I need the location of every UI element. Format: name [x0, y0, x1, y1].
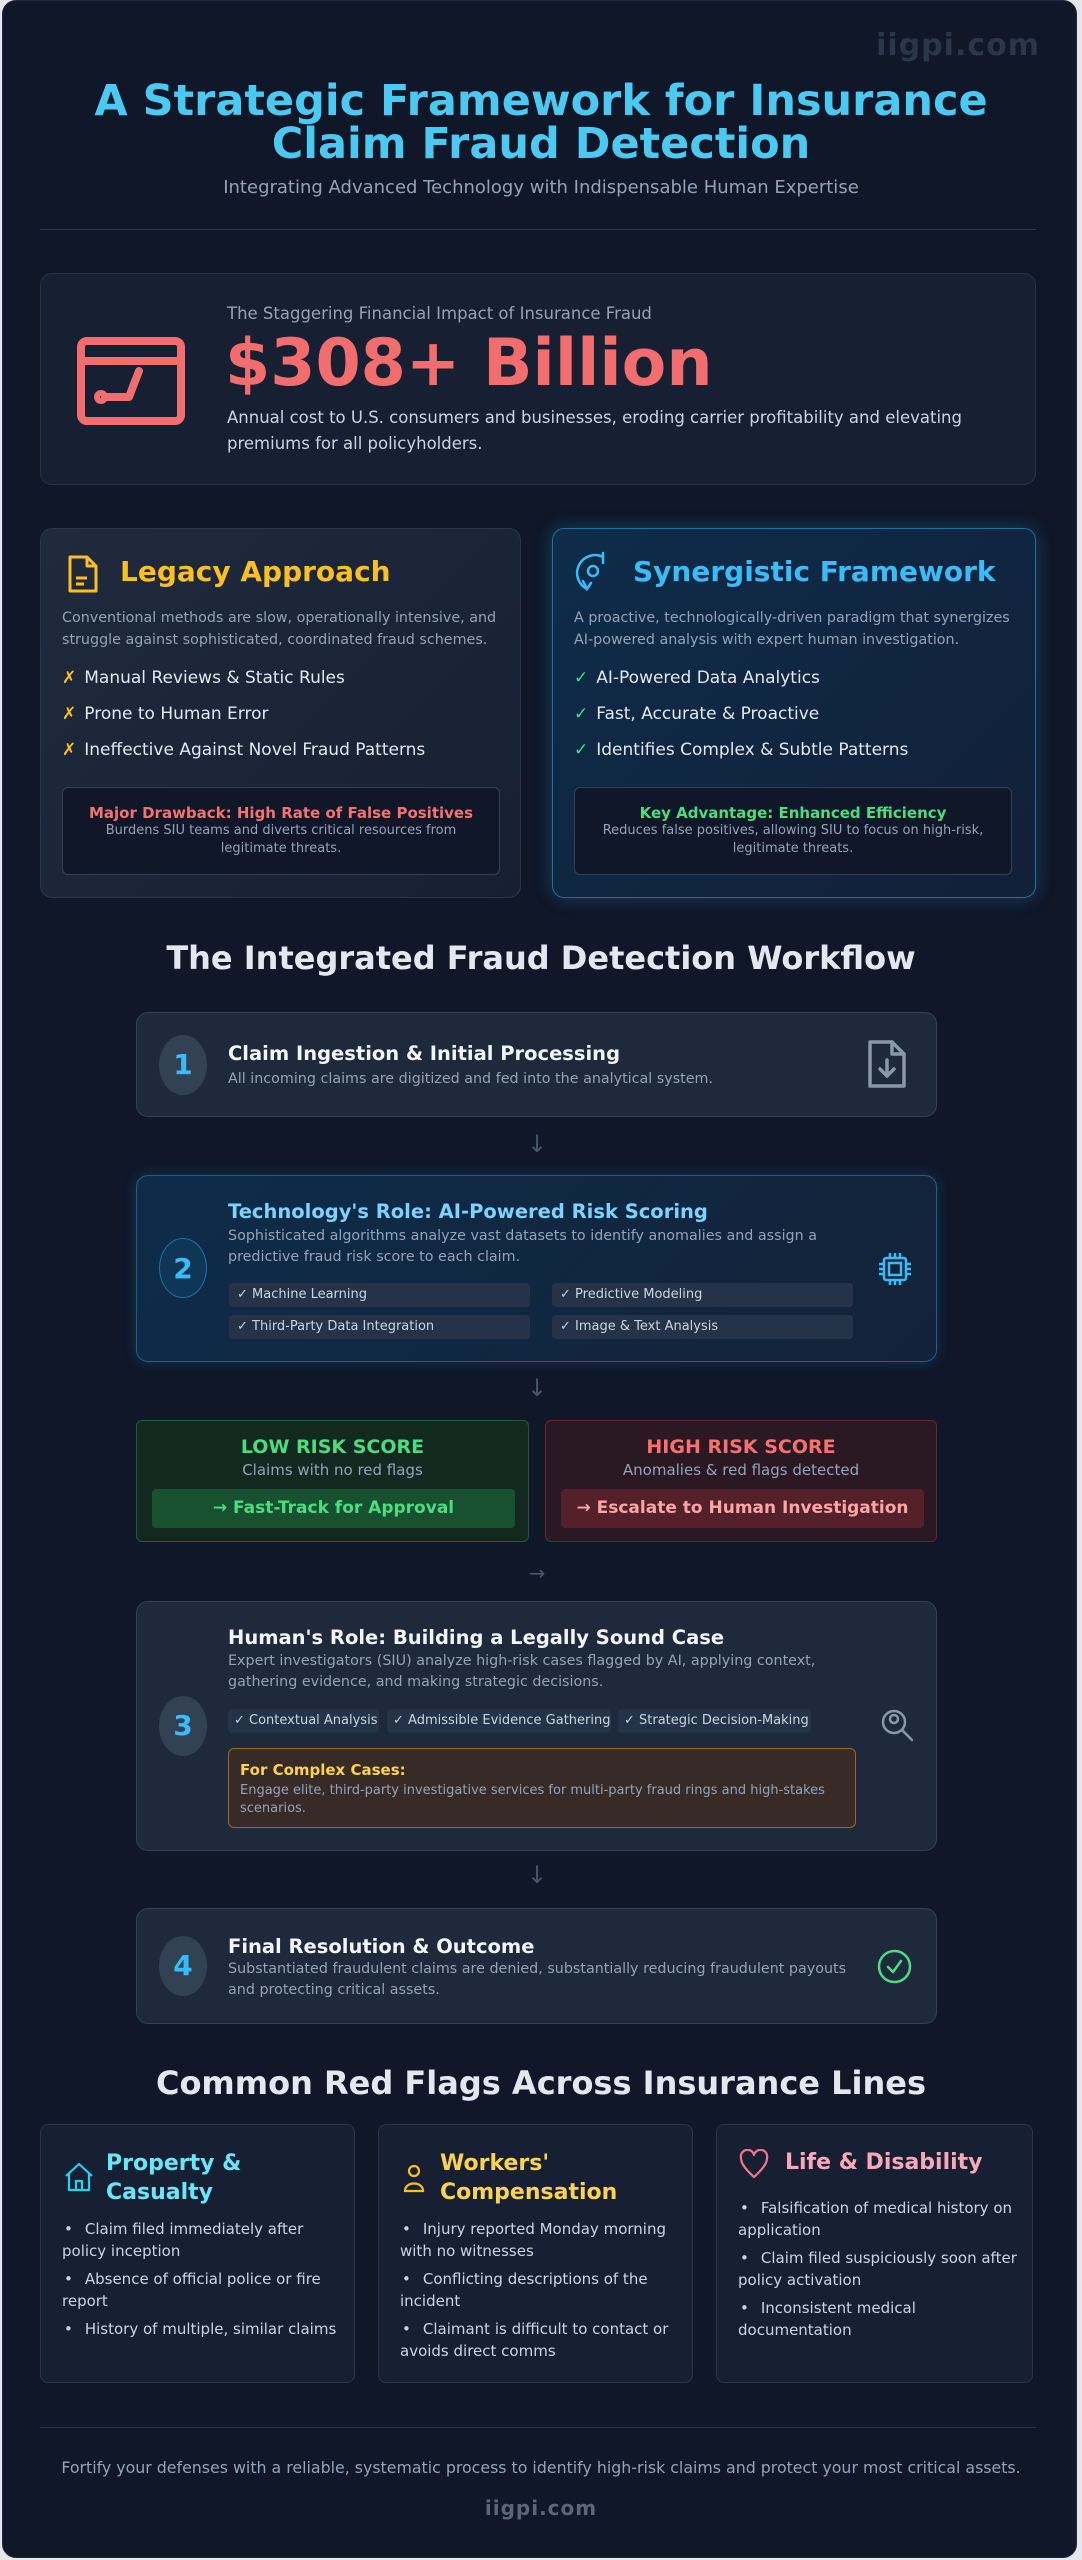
panel: life & disability	[716, 2124, 1033, 2383]
panel: life & disability: Inconsistent medical documentation	[738, 2299, 916, 2339]
list: legacy cons: ✗ Manual Reviews & Static Rules	[62, 668, 345, 688]
step 4 number: 4	[173, 1949, 193, 1982]
list: legacy cons: ✗ Ineffective Against Novel Fraud Patterns	[62, 740, 425, 760]
heading: property: Casualty	[106, 2180, 213, 2205]
callout: advantage	[574, 787, 1012, 875]
icon: check circle	[878, 1950, 912, 1984]
high risk box: HIGH RISK SCORE	[646, 1436, 836, 1458]
list: legacy cons	[62, 668, 425, 760]
step 3 number: 3	[173, 1709, 193, 1742]
heading: life: Life & Disability	[785, 2150, 983, 2175]
panel: life & disability: Claim filed suspiciously soon after policy activation	[738, 2249, 1017, 2289]
icon: person	[404, 2164, 424, 2192]
high risk box	[545, 1420, 937, 1542]
callout: complex cases	[228, 1748, 856, 1828]
panel: life & disability: Falsification of medical history on application	[738, 2199, 1012, 2239]
icon: chip	[879, 1253, 911, 1285]
step 2	[136, 1175, 937, 1362]
list: synergistic pros: ✓ Fast, Accurate & Proactive	[574, 704, 819, 724]
button: fast-track: → Fast-Track for Approval	[213, 1498, 454, 1518]
arrow 2: ↓	[527, 1374, 547, 1402]
step 3 number	[159, 1696, 207, 1756]
callout: advantage: Reduces false positives, allowing SIU to focus on high-risk, legitimate threats.	[603, 823, 983, 856]
arrow 3: →	[529, 1561, 545, 1585]
text: legacy desc: Conventional methods are slow, operationally intensive, and struggle against sophisticated, coordinated fraud schemes.	[62, 610, 496, 648]
panel: property & casualty: History of multiple, similar claims	[85, 2320, 336, 2338]
panel: workers comp	[378, 2124, 693, 2383]
step 1 title: Claim Ingestion & Initial Processing	[228, 1042, 620, 1065]
callout: complex cases: Engage elite, third-party investigative services for multi-party fraud rings and high-stakes scenarios.	[240, 1783, 825, 1816]
step 4	[136, 1908, 937, 2024]
footer watermark: iigpi.com	[485, 2496, 597, 2520]
low risk box: Claims with no red flags	[242, 1461, 423, 1479]
heading: workers: Compensation	[440, 2180, 617, 2205]
big number: $308+ Billion	[225, 326, 713, 401]
step 2 number: 2	[173, 1252, 193, 1285]
button: fast-track	[152, 1489, 515, 1528]
impact description: Annual cost to U.S. consumers and businesses, eroding carrier profitability and elevating premiums for all policyholders.	[227, 408, 962, 453]
list: synergistic pros: ✓ Identifies Complex & Subtle Patterns	[574, 740, 908, 760]
callout: drawback	[62, 787, 500, 875]
subtitle: Integrating Advanced Technology with Indispensable Human Expertise	[223, 177, 859, 198]
panel: property & casualty	[40, 2124, 355, 2383]
text: synergistic desc: A proactive, technologically-driven paradigm that synergizes AI‑powered analysis with expert human investigation.	[574, 610, 1010, 648]
high risk box: Anomalies & red flags detected	[623, 1461, 859, 1479]
step 4 number	[159, 1936, 207, 1996]
step 1 number	[159, 1035, 207, 1095]
step 4 desc: Substantiated fraudulent claims are denied, substantially reducing fraudulent payouts and protecting critical assets.	[228, 1961, 846, 1998]
list: synergistic pros	[574, 668, 908, 760]
button: escalate: → Escalate to Human Investigation	[576, 1498, 909, 1518]
step 1 desc: All incoming claims are digitized and fed into the analytical system.	[228, 1071, 713, 1087]
icon: house	[65, 2162, 93, 2192]
arrow 1: ↓	[527, 1130, 547, 1158]
panel: workers comp: Injury reported Monday morning with no witnesses	[400, 2220, 666, 2260]
heading: property	[106, 2151, 241, 2205]
step 3	[136, 1601, 937, 1851]
heading: red flags: Common Red Flags Across Insurance Lines	[156, 2064, 926, 2102]
callout: complex cases: For Complex Cases:	[240, 1761, 406, 1779]
icon: heart	[740, 2149, 768, 2178]
tags: tech	[229, 1283, 853, 1339]
callout: drawback: Burdens SIU teams and diverts critical resources from legitimate threats.	[106, 823, 456, 856]
text: ✓ Third-Party Data Integration	[237, 1319, 434, 1334]
low risk box	[136, 1420, 529, 1542]
heading: workers: Workers'	[440, 2151, 549, 2176]
arrow 4: ↓	[527, 1861, 547, 1889]
tags: human	[228, 1709, 811, 1733]
heading: property: Property &	[106, 2151, 241, 2176]
watermark top: iigpi.com	[876, 28, 1040, 63]
step 2 title: Technology's Role: AI-Powered Risk Scoring	[228, 1200, 708, 1223]
icon: magnifier	[882, 1710, 914, 1742]
text: ✓ Contextual Analysis	[234, 1713, 377, 1728]
text: ✓ Machine Learning	[237, 1287, 367, 1302]
list: legacy cons: ✗ Prone to Human Error	[62, 704, 268, 724]
text: ✓ Image & Text Analysis	[560, 1319, 718, 1334]
icon: credit card with check	[77, 337, 185, 425]
footer text: Fortify your defenses with a reliable, systematic process to identify high-risk claims and protect your most critical assets.	[61, 2458, 1021, 2477]
text: ✓ Strategic Decision-Making	[624, 1713, 809, 1728]
text: ✓ Admissible Evidence Gathering	[393, 1713, 610, 1728]
icon: document	[68, 556, 98, 592]
heading: workflow: The Integrated Fraud Detection Workflow	[166, 939, 916, 977]
button: escalate	[561, 1489, 924, 1528]
text: ✓ Predictive Modeling	[560, 1287, 702, 1302]
step 3 title: Human's Role: Building a Legally Sound Case	[228, 1626, 724, 1649]
heading: workers	[440, 2151, 617, 2205]
title: A Strategic Framework for Insurance	[94, 76, 988, 126]
title: Claim Fraud Detection	[272, 119, 810, 169]
panel: property & casualty: Claim filed immediately after policy inception	[62, 2220, 303, 2260]
panel: property & casualty: Absence of official police or fire report	[62, 2270, 321, 2310]
list: synergistic pros: ✓ AI-Powered Data Analytics	[574, 668, 820, 688]
icon: file download	[868, 1040, 906, 1088]
low risk box: LOW RISK SCORE	[241, 1436, 424, 1458]
panel: workers comp: Conflicting descriptions of the incident	[400, 2270, 648, 2310]
step 1	[136, 1012, 937, 1117]
title	[94, 76, 988, 169]
panel: legacy approach	[40, 528, 521, 898]
callout: drawback: Major Drawback: High Rate of False Positives	[89, 804, 473, 822]
step 3 desc: Expert investigators (SIU) analyze high-risk cases flagged by AI, applying context, gathering evidence, and making strategic decisions.	[228, 1653, 815, 1690]
step 2 number	[159, 1238, 207, 1298]
panel: financial impact	[40, 273, 1036, 485]
heading: synergistic: Synergistic Framework	[633, 555, 996, 588]
icon: brain gear	[576, 552, 604, 592]
panel: synergistic framework	[552, 528, 1036, 898]
impact label: The Staggering Financial Impact of Insurance Fraud	[227, 304, 652, 323]
step 1 number: 1	[173, 1048, 193, 1081]
panel: workers comp: Claimant is difficult to contact or avoids direct comms	[400, 2320, 668, 2360]
step 4 title: Final Resolution & Outcome	[228, 1935, 534, 1958]
callout: advantage: Key Advantage: Enhanced Efficiency	[640, 804, 946, 822]
heading: legacy: Legacy Approach	[120, 555, 391, 588]
step 2 desc: Sophisticated algorithms analyze vast datasets to identify anomalies and assign a predictive fraud risk score to each claim.	[228, 1228, 817, 1265]
